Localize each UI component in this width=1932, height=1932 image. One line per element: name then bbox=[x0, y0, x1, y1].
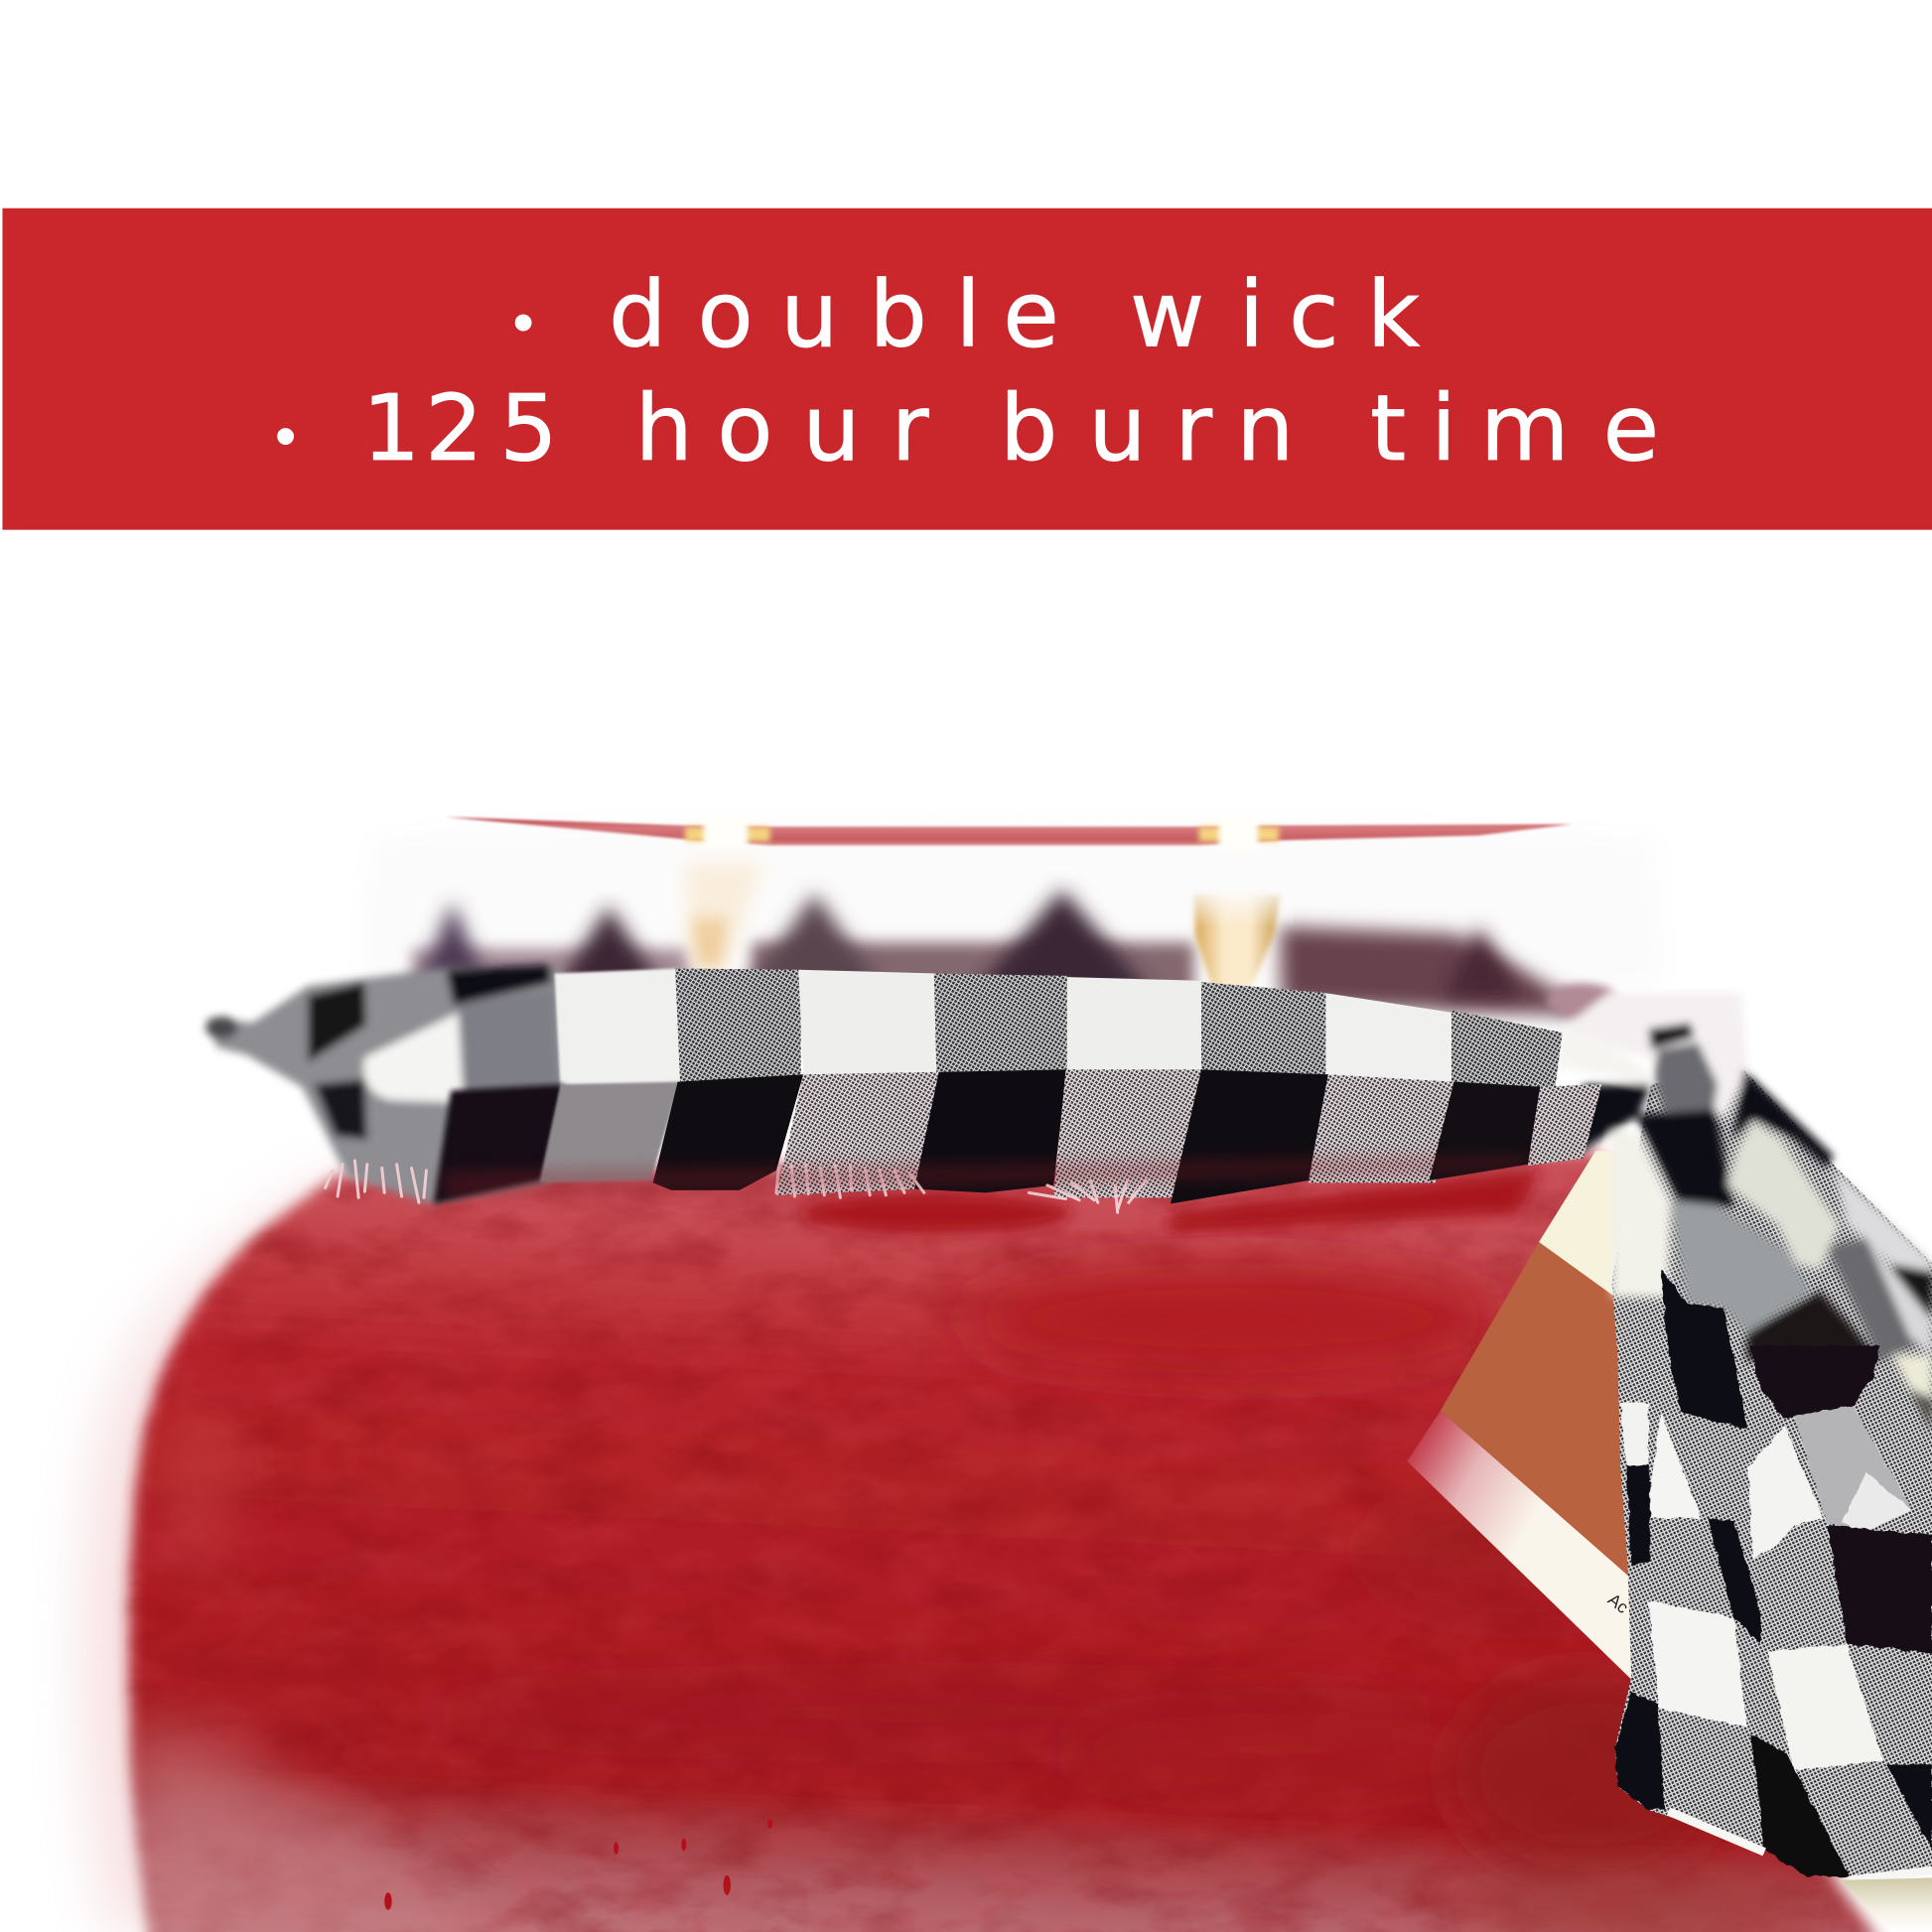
ribbon left tip bbox=[206, 965, 567, 1204]
lower row black and grey checks bbox=[434, 1069, 1601, 1204]
line: 125 hour burn time: burn bbox=[1000, 375, 1294, 482]
red wax body bbox=[0, 1109, 1932, 1932]
tag brown panel bbox=[1441, 1242, 1632, 1580]
left flame bbox=[685, 818, 770, 967]
line: 125 hour burn time bbox=[275, 375, 1659, 482]
right flame bbox=[1182, 818, 1294, 988]
tag small text: Ac bbox=[1604, 1589, 1632, 1617]
upper tail and knot, soft focus bbox=[1547, 983, 1932, 1432]
banner background bbox=[2, 208, 1932, 530]
line: 125 hour burn time: time bbox=[1370, 375, 1659, 482]
glass jar neck bbox=[357, 817, 1663, 986]
candle jar photo bbox=[0, 817, 1932, 1932]
hang tag bbox=[1407, 1151, 1639, 1683]
line: double wick: double bbox=[609, 262, 1059, 368]
tag top cream strip bbox=[1539, 1151, 1626, 1302]
line: double wick bbox=[512, 262, 1420, 368]
tag lower strip bbox=[1407, 1411, 1639, 1683]
line: double wick: • bbox=[512, 289, 534, 357]
tag strip bottom right bbox=[1840, 1877, 1932, 1932]
gingham ribbon wrap bbox=[206, 965, 1601, 1212]
lower tail checks bbox=[1615, 1269, 1932, 1876]
line: double wick: wick bbox=[1130, 262, 1420, 368]
line: 125 hour burn time: • bbox=[275, 402, 296, 471]
gingham ribbon tails bbox=[1547, 983, 1932, 1880]
red stain along ribbon edge bbox=[444, 1156, 1528, 1201]
ribbon fringe bbox=[326, 1161, 1146, 1212]
wax rim line bbox=[445, 817, 1573, 845]
tail bottom white fringe bbox=[1668, 1811, 1932, 1880]
tail base weave bbox=[1611, 1069, 1932, 1876]
dark wax band behind ribbon bbox=[413, 890, 1601, 1017]
candle flames bbox=[685, 818, 1294, 988]
red banner bbox=[2, 208, 1932, 530]
upper row white and grey checks bbox=[554, 968, 1563, 1092]
line: 125 hour burn time: hour bbox=[635, 375, 929, 482]
line: 125 hour burn time: 125 bbox=[362, 375, 558, 482]
